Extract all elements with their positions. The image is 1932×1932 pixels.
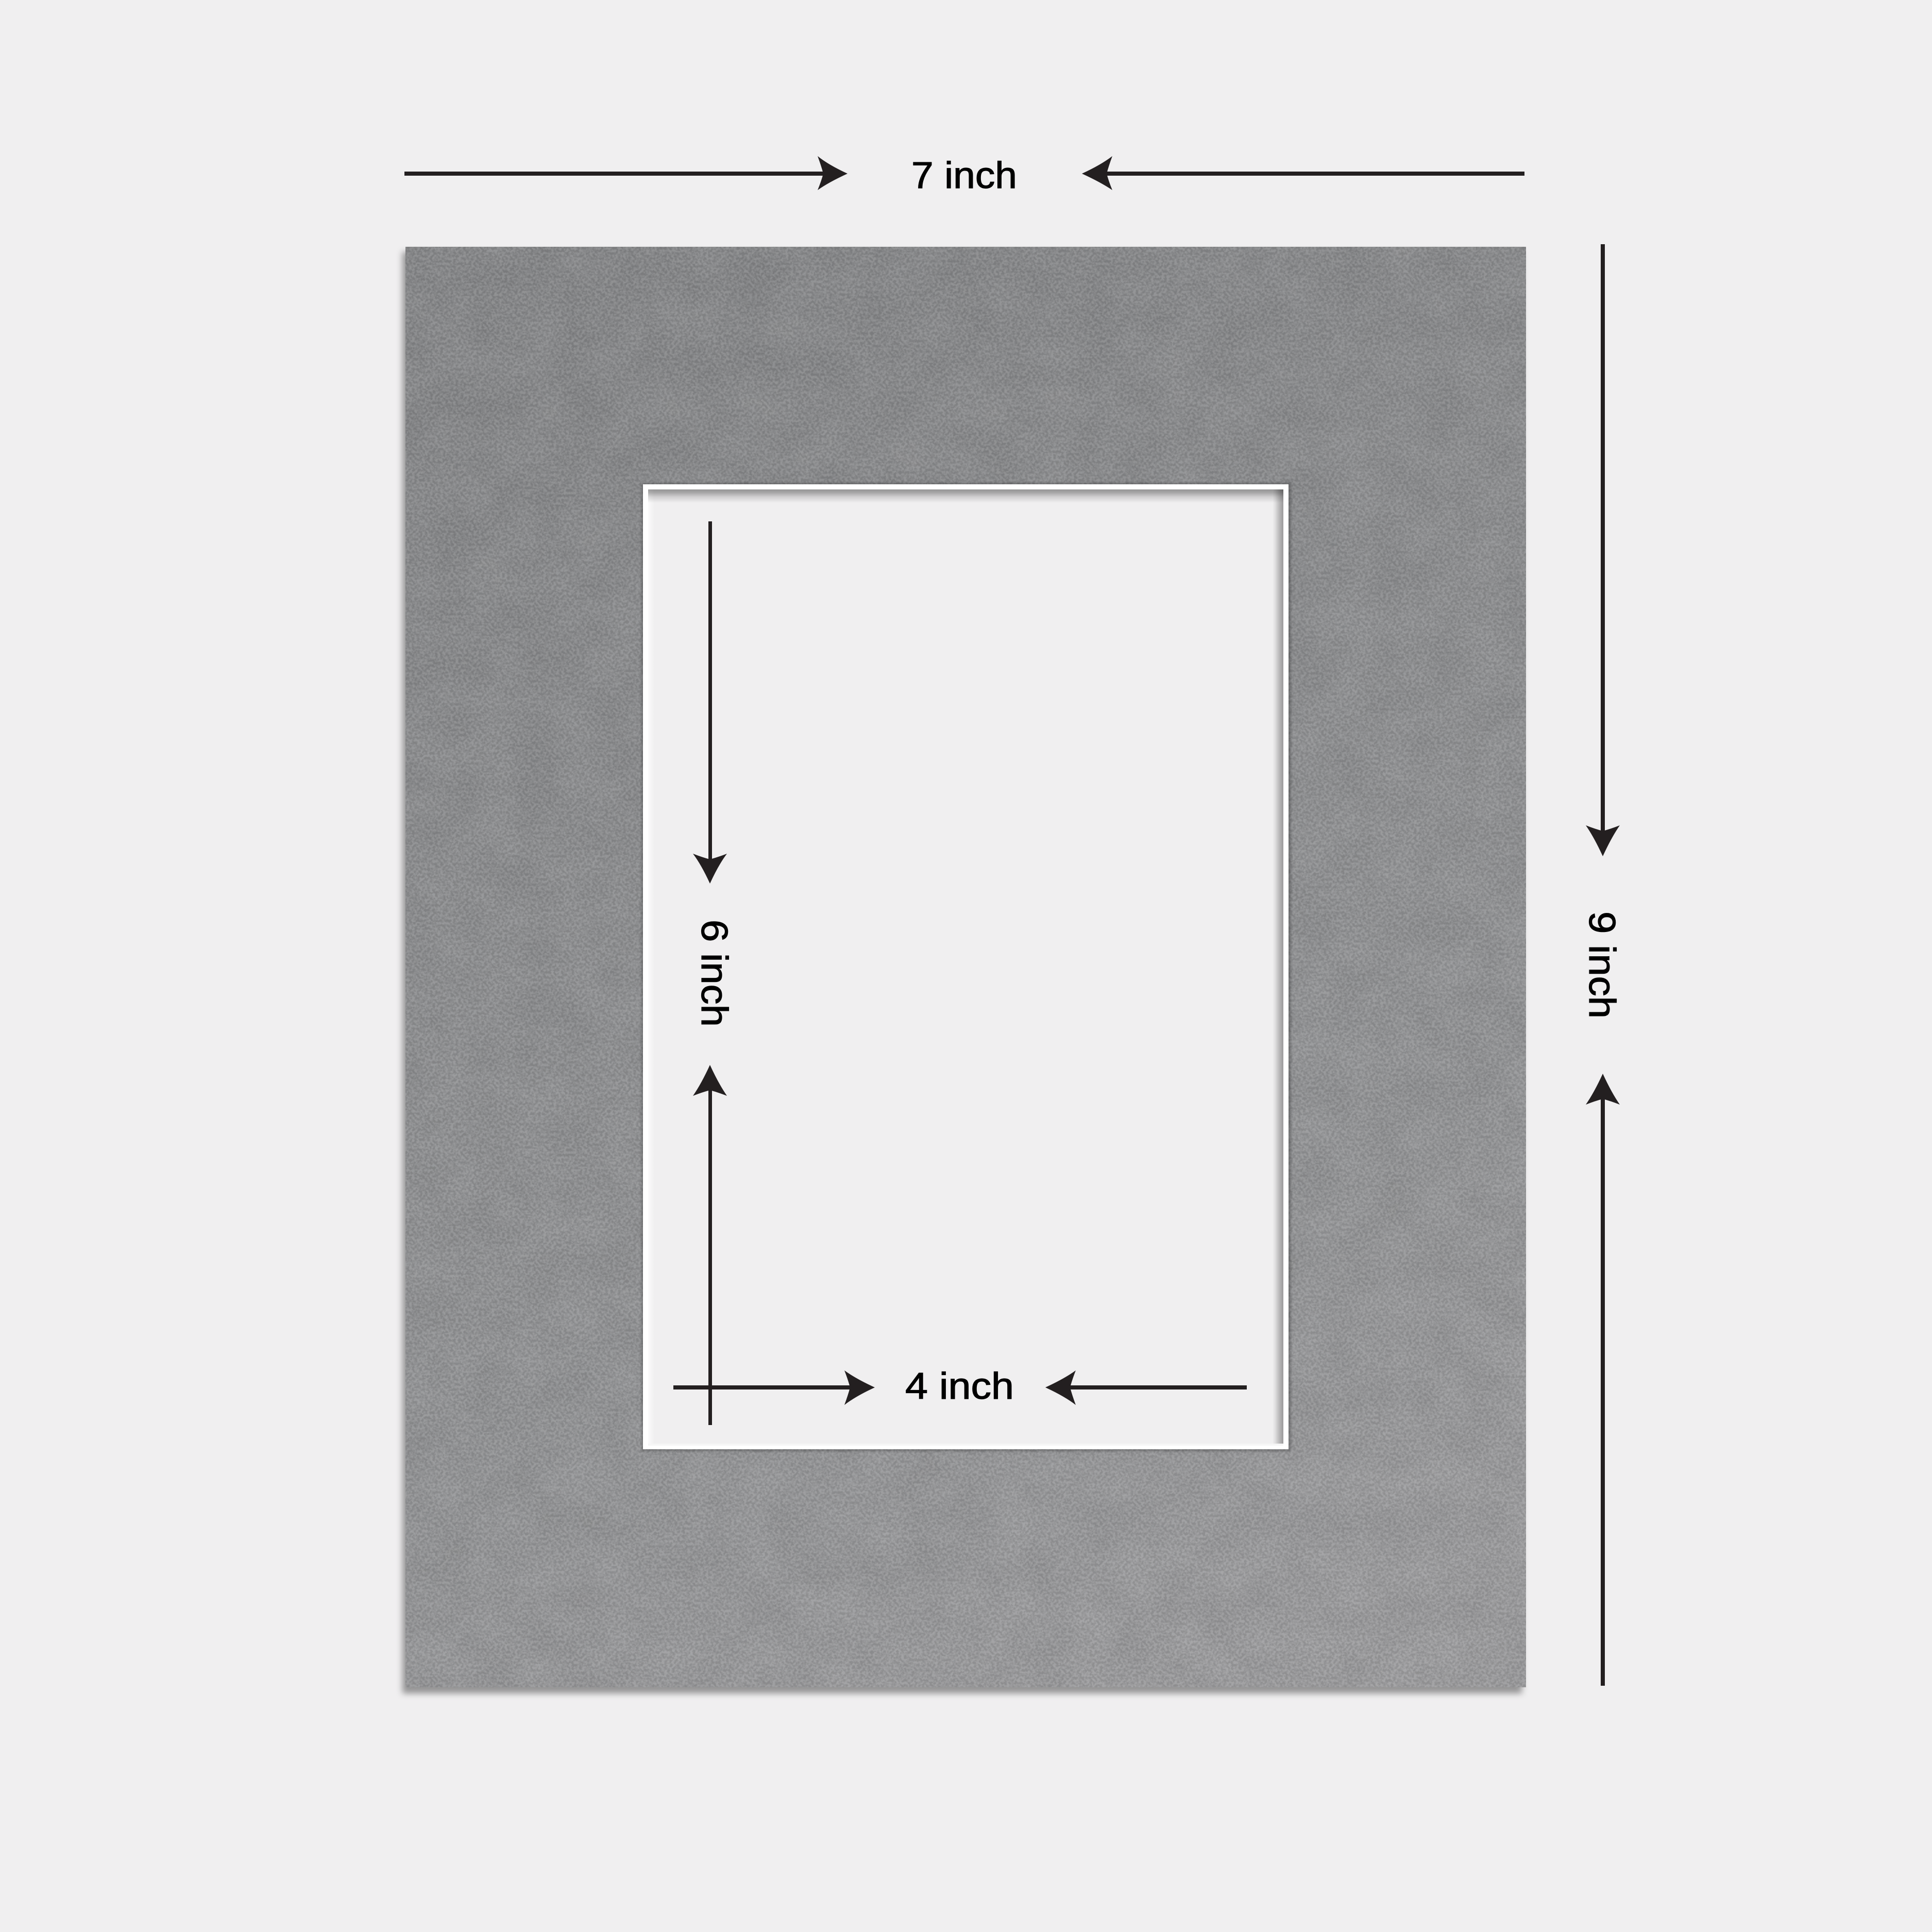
dimension: mat width 7 inch bbox=[404, 155, 1524, 196]
mat fine grain bbox=[405, 247, 1526, 1687]
label: 7 inch: 7 inch bbox=[911, 155, 1017, 196]
photo mat board bbox=[402, 247, 1526, 1693]
arrow: up pointing, right bbox=[1586, 1074, 1620, 1686]
label: 6 inch: 6 inch bbox=[693, 920, 735, 1027]
label: 9 inch: 9 inch bbox=[1581, 911, 1622, 1019]
white bevel bbox=[643, 484, 1289, 1449]
arrow: down pointing, window bbox=[693, 521, 727, 884]
left bevel highlight bbox=[648, 489, 654, 1444]
mat surface bbox=[405, 247, 1526, 1687]
window opening bbox=[641, 483, 1291, 1451]
top inner shadow bbox=[648, 489, 1283, 503]
dimension: window width 4 inch bbox=[673, 1366, 1247, 1407]
arrow: right pointing, top bbox=[404, 156, 848, 190]
right inner shadow bbox=[1273, 489, 1283, 1444]
mat blotchy texture bbox=[405, 247, 1526, 1687]
mat drop shadow bbox=[402, 252, 1522, 1693]
dimension: window height 6 inch bbox=[693, 521, 735, 1425]
window interior bbox=[648, 489, 1283, 1444]
label: 4 inch: 4 inch bbox=[905, 1366, 1014, 1407]
dimension: mat height 9 inch bbox=[1581, 244, 1622, 1686]
arrow: left pointing, window bbox=[1045, 1370, 1247, 1405]
arrow: right pointing, window bbox=[673, 1370, 875, 1405]
arrow: left pointing, top bbox=[1082, 156, 1524, 190]
window edge shadow on mat bbox=[641, 483, 1291, 1451]
arrow: up pointing, window bbox=[693, 1065, 727, 1425]
bottom bevel highlight bbox=[648, 1444, 1283, 1446]
arrow: down pointing, right bbox=[1586, 244, 1620, 856]
